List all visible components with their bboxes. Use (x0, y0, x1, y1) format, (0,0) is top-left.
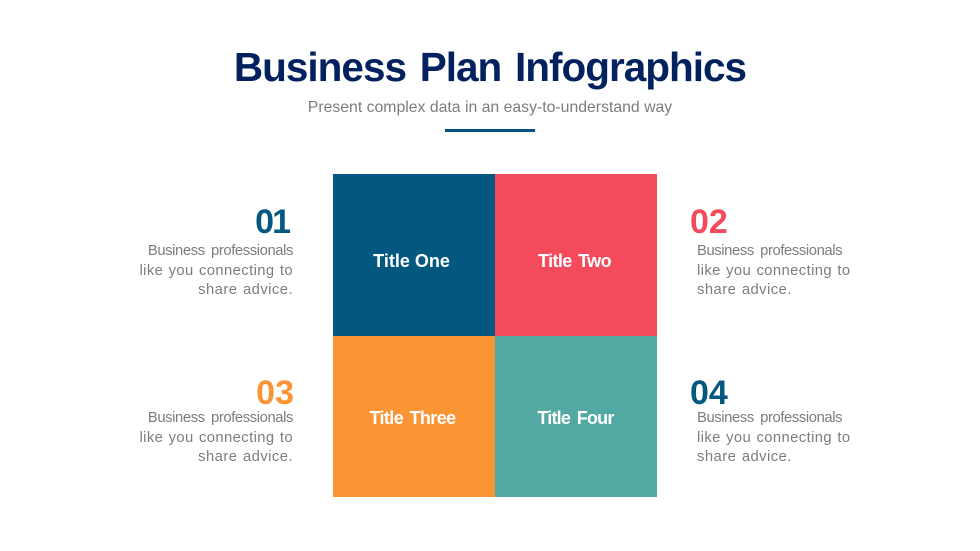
panel: title two (495, 174, 657, 336)
text block 04: share advice. (697, 449, 792, 465)
subtitle: Present complex data in an easy-to-understand way (308, 98, 672, 116)
text block 01: like you connecting to (139, 262, 293, 278)
text block 04: Business professionals (697, 410, 842, 426)
panel: title two: Title Two (538, 251, 611, 271)
text block 03 (139, 410, 293, 465)
panel: title one (333, 174, 495, 336)
text block 03: share advice. (198, 449, 293, 465)
panel: title four (495, 336, 657, 497)
text block 02: Business professionals (697, 243, 842, 259)
title: Business Plan Infographics (234, 44, 746, 90)
text block 02 (697, 243, 851, 298)
number 02: 02 (690, 203, 728, 241)
text block 04 (697, 410, 851, 465)
number 03: 03 (256, 374, 294, 412)
text block 03: like you connecting to (139, 430, 293, 446)
text block 03: Business professionals (148, 410, 293, 426)
text block 04: like you connecting to (697, 430, 851, 446)
number 01: 01 (255, 203, 289, 241)
text block 01: share advice. (198, 282, 293, 298)
number 04: 04 (690, 374, 728, 412)
text block 01: Business professionals (148, 243, 293, 259)
panel: title one: Title One (373, 251, 450, 271)
title underline (445, 129, 535, 132)
text block 01 (139, 243, 293, 298)
text block 02: like you connecting to (697, 262, 851, 278)
text block 02: share advice. (697, 282, 792, 298)
panel: title three (333, 336, 495, 497)
panel: title three: Title Three (369, 408, 456, 428)
panel: title four: Title Four (537, 408, 614, 428)
